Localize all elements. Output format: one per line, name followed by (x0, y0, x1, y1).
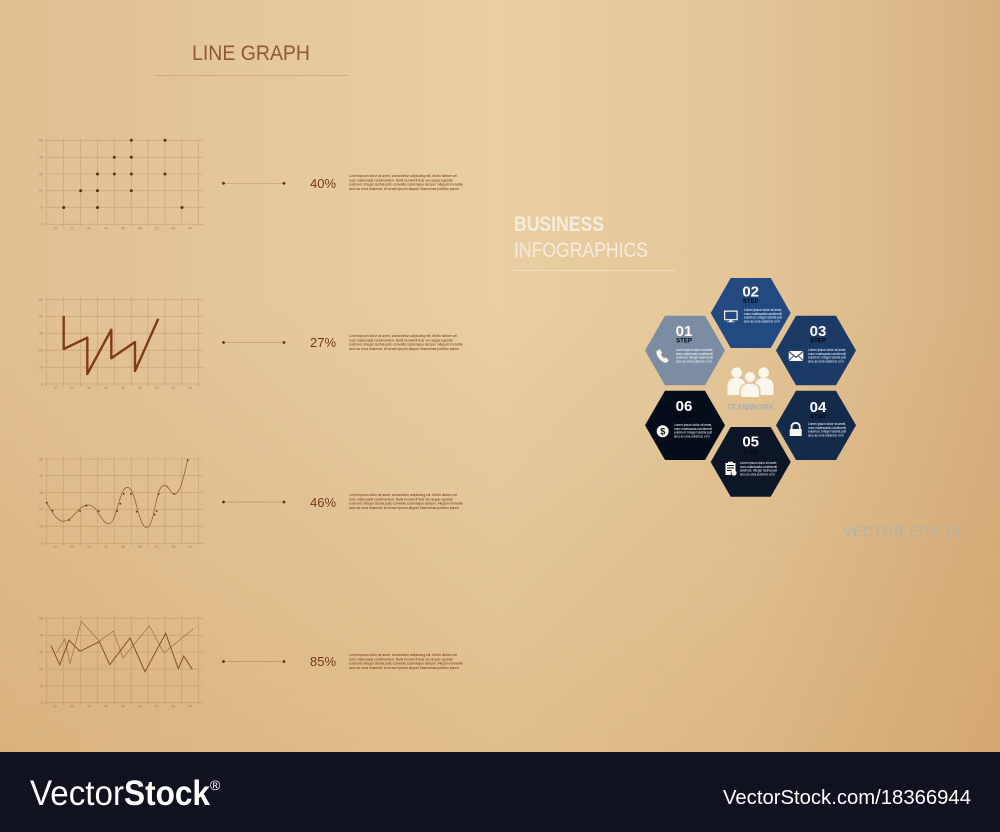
hexagon 05: arcu ac urna euismod, et or (740, 472, 776, 476)
hexagon 06: Lorem ipsum dolor sit amet, (674, 423, 712, 427)
icon: phone (656, 349, 669, 363)
double line chart: 60 (138, 704, 142, 708)
smooth curve chart: 20 (70, 545, 74, 549)
hexagon 05: Lorem ipsum dolor sit amet, (740, 461, 777, 465)
hexagon 06 (645, 391, 725, 460)
scatter chart: 30 (87, 226, 91, 230)
row 3 value: 46%: nunc malesuada condimentum. Nulla hendrerit felis nec augue egestas (349, 496, 453, 501)
row 1 value: 40%: 40% (310, 176, 336, 191)
hexagon 03: euismod. Integer lacinia just (808, 356, 846, 360)
hexagon 06: STEP (676, 414, 692, 420)
heading: business infographics: BUSINESS (514, 213, 604, 236)
icon: padlock (790, 422, 802, 436)
row 4 value: 85%: Lorem ipsum dolor sit amet, consectetur adipiscing elit. Morbi dictum vel (349, 652, 457, 657)
row 1 value: 40%: arcu ac urna euismod, et ornare ipsum aliquet. Maecenas porttitor ipsum (349, 186, 459, 191)
smooth curve chart: 40 (39, 474, 43, 478)
smooth curve chart: 80 (172, 545, 176, 549)
scatter chart: 50 (39, 139, 43, 143)
thick zigzag line chart: 10 (53, 386, 57, 390)
icon: envelope (789, 351, 803, 361)
double line chart: 40 (39, 634, 43, 638)
scatter chart (39, 138, 203, 230)
smooth curve chart: 0 (41, 542, 43, 546)
smooth curve chart: 50 (121, 545, 125, 549)
hexagon 01: STEP (676, 338, 692, 344)
smooth curve chart: 30 (39, 491, 43, 495)
hexagon 05 (711, 427, 791, 497)
row 4 value: 85%: arcu ac urna euismod, et ornare ipsum aliquet. Maecenas porttitor ipsum (349, 665, 459, 670)
icon: dollar coin: $ (660, 427, 665, 437)
scatter chart: 40 (104, 226, 108, 230)
thick zigzag line chart: 10 (39, 366, 43, 370)
heading: business infographics: INFOGRAPHICS (514, 239, 648, 262)
scatter chart: 40 (39, 156, 43, 160)
hexagon 05: 05 (742, 434, 759, 450)
row 3 value: 46% (222, 492, 463, 510)
hexagon 06: 06 (676, 398, 692, 415)
title: line graph: LINE GRAPH (192, 42, 310, 65)
double line chart: 80 (172, 704, 176, 708)
hexagon 04: arcu ac urna euismod, et or (808, 433, 845, 437)
thick zigzag line chart (39, 297, 203, 390)
double line chart (39, 616, 203, 708)
row 2 value: 27%: nunc malesuada condimentum. Nulla hendrerit felis nec augue egestas (349, 337, 453, 342)
double line chart: 40 (104, 704, 108, 708)
hexagon 05: STEP (743, 450, 759, 456)
scatter chart: 30 (39, 172, 43, 176)
smooth curve chart: 50 (39, 457, 43, 461)
thick zigzag line chart: 0 (41, 382, 43, 386)
scatter chart: 20 (70, 226, 74, 230)
hexagon 03: STEP (810, 338, 826, 344)
smooth curve chart: 90 (188, 545, 192, 549)
hexagon 04: Lorem ipsum dolor sit amet, (808, 422, 846, 426)
row 2 value: 27%: euismod. Integer lacinia justo convallis scelerisque semper. Aliquam molestie (349, 342, 463, 347)
row 2 value: 27%: 27% (310, 335, 336, 350)
smooth curve chart: 10 (39, 525, 43, 529)
double line chart: 0 (41, 701, 43, 705)
thick zigzag line chart: 80 (172, 386, 176, 390)
thick zigzag line chart: 50 (121, 386, 125, 390)
double line chart: 10 (53, 704, 57, 708)
thick zigzag line chart: 30 (87, 386, 91, 390)
label: vector eps 10: VECTOR EPS 10 (843, 523, 961, 539)
scatter chart: 80 (172, 226, 176, 230)
scatter chart: 20 (39, 189, 43, 193)
hexagon 06: euismod. Integer lacinia just (674, 431, 712, 435)
hexagon 04: STEP (810, 414, 826, 420)
hexagon 02 (711, 278, 791, 348)
thick zigzag line chart: 70 (154, 386, 158, 390)
scatter chart: 60 (138, 226, 142, 230)
row 1 value: 40%: Lorem ipsum dolor sit amet, consectetur adipiscing elit. Morbi dictum vel (349, 173, 457, 178)
hexagon 03: Lorem ipsum dolor sit amet, (808, 348, 846, 352)
scatter chart: 10 (39, 206, 43, 210)
double line chart: 70 (154, 704, 158, 708)
double line chart: 30 (39, 650, 43, 654)
hexagon 03: 03 (810, 323, 826, 340)
smooth curve chart: 70 (154, 545, 158, 549)
heading: business infographics (514, 213, 675, 270)
double line chart: 90 (188, 704, 192, 708)
scatter chart: 50 (121, 226, 125, 230)
row 4 value: 85%: 85% (310, 654, 336, 669)
hexagon 01: nunc malesuada condimenti (676, 352, 713, 356)
thick zigzag line chart: 50 (39, 298, 43, 302)
footer bar (0, 752, 1000, 832)
hexagon 05: euismod. Integer lacinia just (740, 469, 777, 473)
hexagon 01: euismod. Integer lacinia just (676, 356, 713, 360)
double line chart: 50 (121, 704, 125, 708)
hexagon 03 (776, 316, 856, 385)
smooth curve chart: 60 (138, 545, 142, 549)
row 1 value: 40%: nunc malesuada condimentum. Nulla hendrerit felis nec augue egestas (349, 177, 453, 182)
smooth curve chart: 10 (53, 545, 57, 549)
double line chart: 30 (87, 704, 91, 708)
double line chart: 20 (70, 704, 74, 708)
double line chart: 50 (39, 617, 43, 621)
hexagon 04: euismod. Integer lacinia just (808, 430, 846, 434)
hexagon 03: nunc malesuada condimenti (808, 352, 846, 356)
hexagon 06: nunc malesuada condimenti (674, 427, 712, 431)
hexagon 03: arcu ac urna euismod, et or (808, 359, 845, 363)
row 4 value: 85%: nunc malesuada condimentum. Nulla hendrerit felis nec augue egestas (349, 656, 453, 661)
thick zigzag line chart: 60 (138, 386, 142, 390)
icon: monitor (724, 310, 738, 322)
footer logo: vector: Vector (30, 774, 124, 813)
row 2 value: 27%: arcu ac urna euismod, et ornare ipsum aliquet. Maecenas porttitor ipsum (349, 346, 459, 351)
icon: clipboard with coin (726, 462, 737, 476)
hexagon 01: 01 (676, 323, 692, 340)
footer logo: stock: Stock (124, 774, 210, 813)
smooth curve chart (39, 457, 203, 549)
row 2 value: 27% (222, 333, 463, 351)
hexagon 02: arcu ac urna euismod, et or (744, 319, 781, 323)
thick zigzag line chart: 30 (39, 332, 43, 336)
scatter chart: 10 (53, 226, 57, 230)
thick zigzag line chart: 40 (104, 386, 108, 390)
smooth curve chart: 30 (87, 545, 91, 549)
hexagon 02: STEP (743, 299, 759, 305)
footer registered mark: ® (210, 777, 221, 793)
double line chart: 20 (39, 667, 43, 671)
hexagon 01 (645, 316, 725, 385)
scatter chart: 90 (188, 226, 192, 230)
row 2 value: 27%: Lorem ipsum dolor sit amet, consectetur adipiscing elit. Morbi dictum vel (349, 333, 457, 338)
row 3 value: 46%: Lorem ipsum dolor sit amet, consectetur adipiscing elit. Morbi dictum vel (349, 492, 457, 497)
thick zigzag line chart: 90 (188, 386, 192, 390)
row 3 value: 46%: arcu ac urna euismod, et ornare ipsum aliquet. Maecenas porttitor ipsum (349, 505, 459, 510)
row 1 value: 40%: euismod. Integer lacinia justo convallis scelerisque semper. Aliquam molestie (349, 182, 463, 187)
smooth curve chart: 40 (104, 545, 108, 549)
thick zigzag line chart: 40 (39, 315, 43, 319)
footer image id: VectorStock.com/18366944 (723, 787, 971, 809)
hexagon 01: Lorem ipsum dolor sit amet, (676, 348, 713, 352)
hexagon 02: 02 (742, 284, 759, 300)
hexagon 04 (776, 391, 856, 460)
scatter chart: 0 (41, 223, 43, 227)
double line chart: 10 (39, 684, 43, 688)
hexagon 02: Lorem ipsum dolor sit amet, (744, 308, 782, 312)
row 4 value: 85%: euismod. Integer lacinia justo convallis scelerisque semper. Aliquam molestie (349, 661, 463, 666)
label: teamwork: TEAMWORK (727, 402, 775, 412)
thick zigzag line chart: 20 (70, 386, 74, 390)
hexagon 02: euismod. Integer lacinia just (744, 316, 782, 320)
hexagon 02: nunc malesuada condimenti (744, 312, 782, 316)
smooth curve chart: 20 (39, 508, 43, 512)
row 3 value: 46%: euismod. Integer lacinia justo convallis scelerisque semper. Aliquam molestie (349, 501, 463, 506)
hexagon 06: arcu ac urna euismod, et or (674, 434, 711, 438)
row 4 value: 85% (222, 652, 463, 670)
icon: teamwork people (728, 367, 774, 397)
hexagon 05: nunc malesuada condimenti (740, 465, 777, 469)
thick zigzag line chart: 20 (39, 349, 43, 353)
row 1 value: 40% (222, 173, 463, 191)
hexagon 04: nunc malesuada condimenti (808, 426, 846, 430)
hexagon 01: arcu ac urna euismod, et or (676, 359, 713, 363)
scatter chart: 70 (154, 226, 158, 230)
row 3 value: 46%: 46% (310, 495, 336, 510)
hexagon 04: 04 (810, 399, 827, 416)
